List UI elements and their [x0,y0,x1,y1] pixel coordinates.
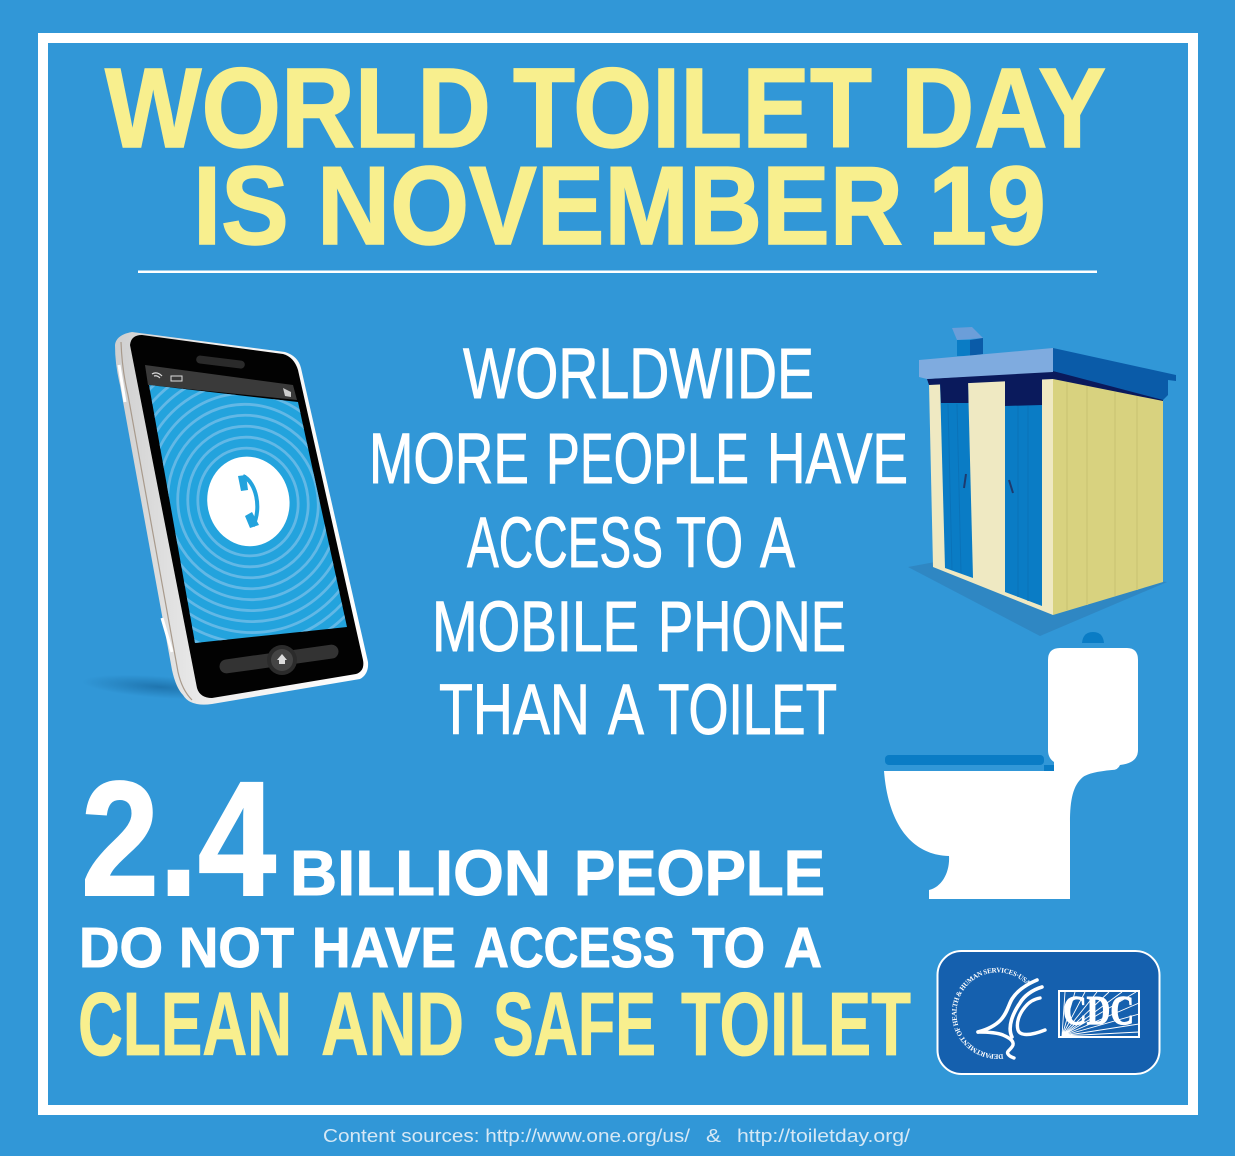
do not have access: A [784,916,822,980]
content sources footer [323,1126,910,1146]
do not have access: NOT [179,916,294,980]
central statement [369,335,908,750]
highlight: clean and safe toilet: TOILET [681,975,911,1075]
phone screen with ripples [149,385,347,643]
content sources footer: & [706,1126,721,1146]
statistic: 2.4 billion people [79,747,825,980]
highlight: clean and safe toilet: CLEAN [78,975,292,1075]
outhouse right wall [1053,378,1163,615]
title [105,45,1106,268]
phone speaker [196,355,245,369]
title: 19 [928,144,1046,268]
phone bezel [130,335,363,698]
toilet seat [885,755,1054,771]
do not have access: ACCESS [474,916,675,980]
central statement: TOILET [658,671,837,750]
toilet flush button [1082,632,1104,643]
title: IS NOVEMBER [193,144,903,268]
outhouse vent [952,327,983,356]
billion people: BILLION [290,837,551,909]
icon: mobile phone [98,332,368,705]
content sources footer: Content sources: http://www.one.org/us/ [323,1126,690,1146]
outhouse roof [919,348,1176,401]
do not have access [79,916,822,980]
central statement: HAVE [767,420,908,499]
icon: outhouse [908,327,1176,636]
central statement: TO [676,504,743,583]
phone call button [199,449,298,554]
central statement: MOBILE [432,588,639,667]
do not have access: HAVE [312,916,456,980]
phone shadow [81,671,239,703]
outhouse front wall [929,376,1053,615]
highlight: clean and safe toilet: SAFE [493,975,656,1075]
icon: toilet [884,632,1138,899]
highlight: clean and safe toilet: AND [321,975,464,1075]
central statement: A [608,671,644,750]
CDC box: CDC [1063,987,1134,1033]
content sources footer: http://toiletday.org/ [737,1126,910,1146]
HHS eagle [978,980,1045,1058]
outhouse shadow [908,562,1167,636]
title: TOILET [513,45,872,171]
central statement: PEOPLE [546,420,749,499]
title: DAY [901,45,1106,171]
billion people [290,837,825,909]
title: WORLD [105,45,491,171]
phone body [115,332,368,705]
logo: HHS and CDC [936,950,1160,1075]
phone home bar [219,644,339,675]
title divider [138,270,1097,273]
central statement: WORLDWIDE [463,335,814,414]
outhouse left door [940,381,973,578]
outhouse right door [1005,378,1042,606]
logo badge [938,951,1160,1074]
phone side edge [121,342,192,700]
central statement: A [760,504,795,583]
central statement: PHONE [658,588,846,667]
highlight: clean and safe toilet [78,975,911,1075]
phone side buttons [119,365,172,652]
central statement: MORE [369,420,529,499]
central statement: ACCESS [467,504,663,583]
do not have access: DO [79,916,163,980]
central statement: THAN [439,671,590,750]
phone status bar [145,365,297,400]
big number: 2.4 [81,747,276,930]
do not have access: TO [692,916,765,980]
toilet body [884,648,1138,899]
HHS seal ring text: DEPARTMENT OF HEALTH & HUMAN SERVICES·USA [952,968,1030,1059]
billion people: PEOPLE [574,837,825,909]
